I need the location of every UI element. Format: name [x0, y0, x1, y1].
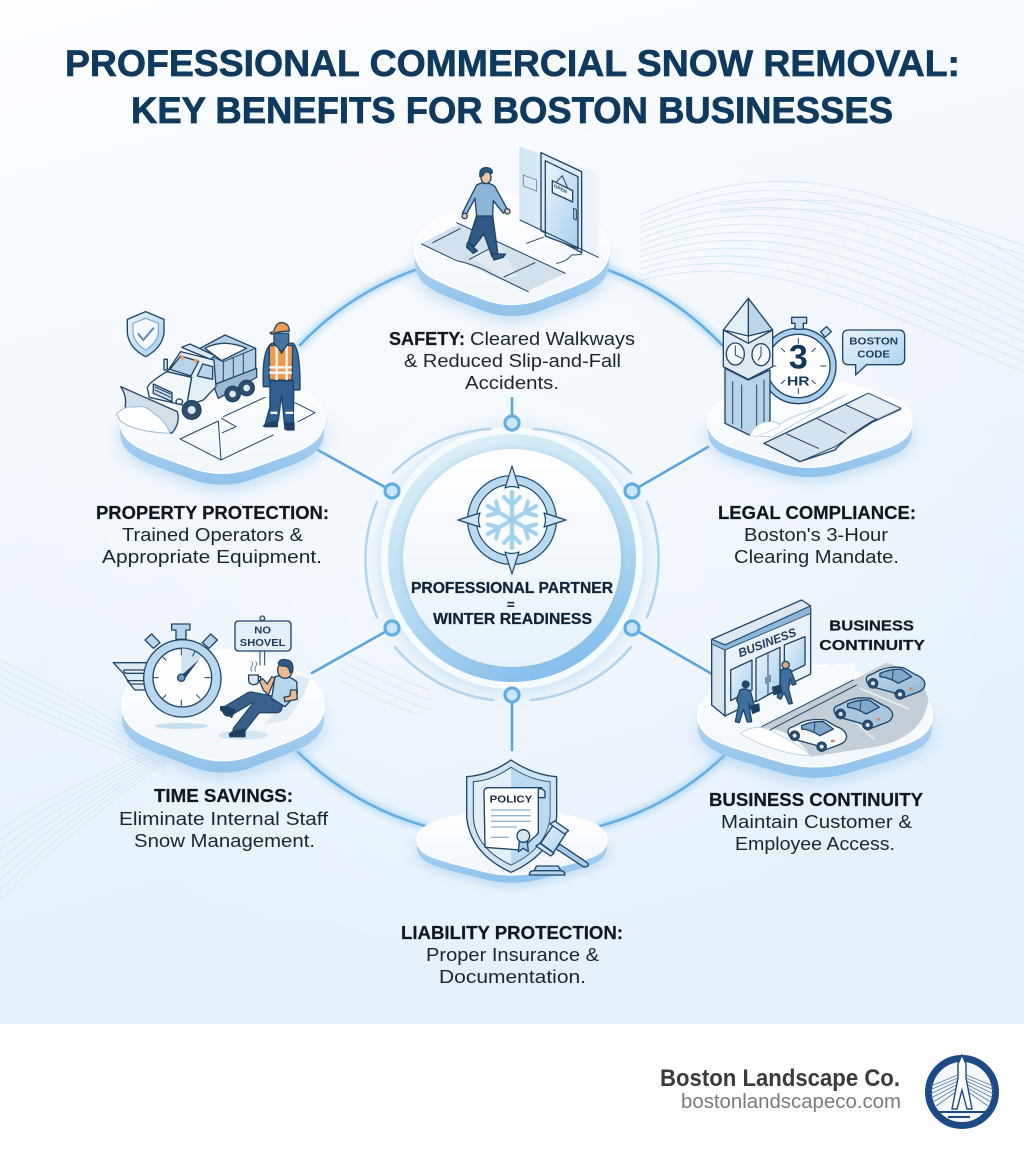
panel: property protection	[96, 312, 329, 567]
business continuity sign text	[819, 619, 925, 654]
label: & Reduced Slip-and-Fall	[404, 351, 621, 371]
label	[389, 329, 635, 393]
connectors	[298, 270, 728, 826]
business continuity sign text: CONTINUITY	[819, 638, 925, 654]
brand name: Boston Landscape Co.	[660, 1065, 900, 1092]
label	[96, 503, 329, 567]
illustration: stopwatch and relaxing person	[113, 616, 310, 740]
illustration: walkway and door: OPEN	[554, 183, 567, 196]
people	[735, 661, 796, 723]
hub text	[411, 580, 613, 628]
platform	[708, 377, 912, 482]
central hub	[365, 416, 659, 702]
business continuity sign text: BUSINESS	[829, 619, 914, 635]
platform	[122, 649, 324, 779]
worker	[263, 323, 300, 430]
label: Appropriate Equipment.	[102, 547, 322, 567]
illustration: storefront and parking	[712, 600, 928, 757]
website: bostonlandscapeco.com	[681, 1091, 901, 1113]
hub text: WINTER READINESS	[433, 611, 592, 628]
illustration: storefront and parking: BUSINESS	[736, 625, 798, 660]
no shovel sign	[235, 616, 291, 665]
no shovel sign: NO	[254, 626, 272, 637]
truck	[117, 335, 257, 433]
illustration: clock tower and stopwatch: HR	[787, 373, 810, 388]
platform	[417, 805, 607, 887]
label: Cleared Walkways	[470, 329, 635, 349]
hub text: PROFESSIONAL PARTNER	[411, 580, 613, 597]
panel: liability protection	[401, 760, 623, 987]
label: Clearing Mandate.	[734, 547, 899, 567]
panel: time savings	[113, 616, 329, 851]
label: Snow Management.	[134, 831, 315, 851]
panel: legal compliance	[708, 298, 916, 567]
hub nodes	[385, 416, 639, 702]
platform	[698, 665, 932, 784]
label	[401, 923, 623, 987]
label: TIME SAVINGS:	[154, 786, 293, 806]
panel: business continuity	[698, 600, 932, 854]
label: Employee Access.	[735, 834, 895, 854]
footer band	[0, 1024, 1024, 1154]
illustration: clock tower and stopwatch: 3	[789, 339, 808, 377]
logo: bridge badge	[928, 1055, 996, 1126]
label: Proper Insurance &	[426, 945, 599, 965]
label: LIABILITY PROTECTION:	[401, 923, 623, 943]
illustration: policy shield and gavel	[467, 760, 588, 875]
platform	[415, 196, 609, 322]
title: PROFESSIONAL COMMERCIAL SNOW REMOVAL:	[65, 43, 960, 84]
illustration: plow truck and worker	[117, 312, 315, 460]
panel: safety	[389, 147, 635, 393]
title	[65, 43, 960, 131]
label: PROPERTY PROTECTION:	[96, 503, 329, 523]
label	[709, 790, 923, 854]
illustration: policy shield and gavel: POLICY	[490, 795, 532, 806]
illustration: clock tower and stopwatch	[723, 298, 905, 462]
label: Accidents.	[465, 373, 559, 393]
cars	[788, 667, 925, 751]
platform	[120, 367, 324, 491]
label: LEGAL COMPLIANCE:	[718, 503, 916, 523]
person	[462, 168, 510, 260]
icon: snowflake compass	[458, 466, 566, 574]
label: Eliminate Internal Staff	[119, 809, 329, 829]
speech bubble	[843, 330, 905, 375]
label: Boston's 3-Hour	[744, 525, 888, 545]
speech bubble: CODE	[857, 350, 891, 361]
speech bubble: BOSTON	[849, 337, 898, 348]
title: KEY BENEFITS FOR BOSTON BUSINESSES	[131, 90, 893, 131]
illustration: walkway and door	[422, 147, 599, 292]
label	[119, 786, 329, 851]
label: BUSINESS CONTINUITY	[709, 790, 923, 810]
label	[718, 503, 916, 567]
label: Trained Operators &	[122, 525, 303, 545]
person	[221, 660, 310, 737]
hub text: =	[507, 597, 515, 612]
label: Documentation.	[439, 967, 586, 987]
label: Maintain Customer &	[721, 812, 912, 832]
no shovel sign: SHOVEL	[240, 638, 286, 649]
label: SAFETY:	[389, 329, 465, 349]
